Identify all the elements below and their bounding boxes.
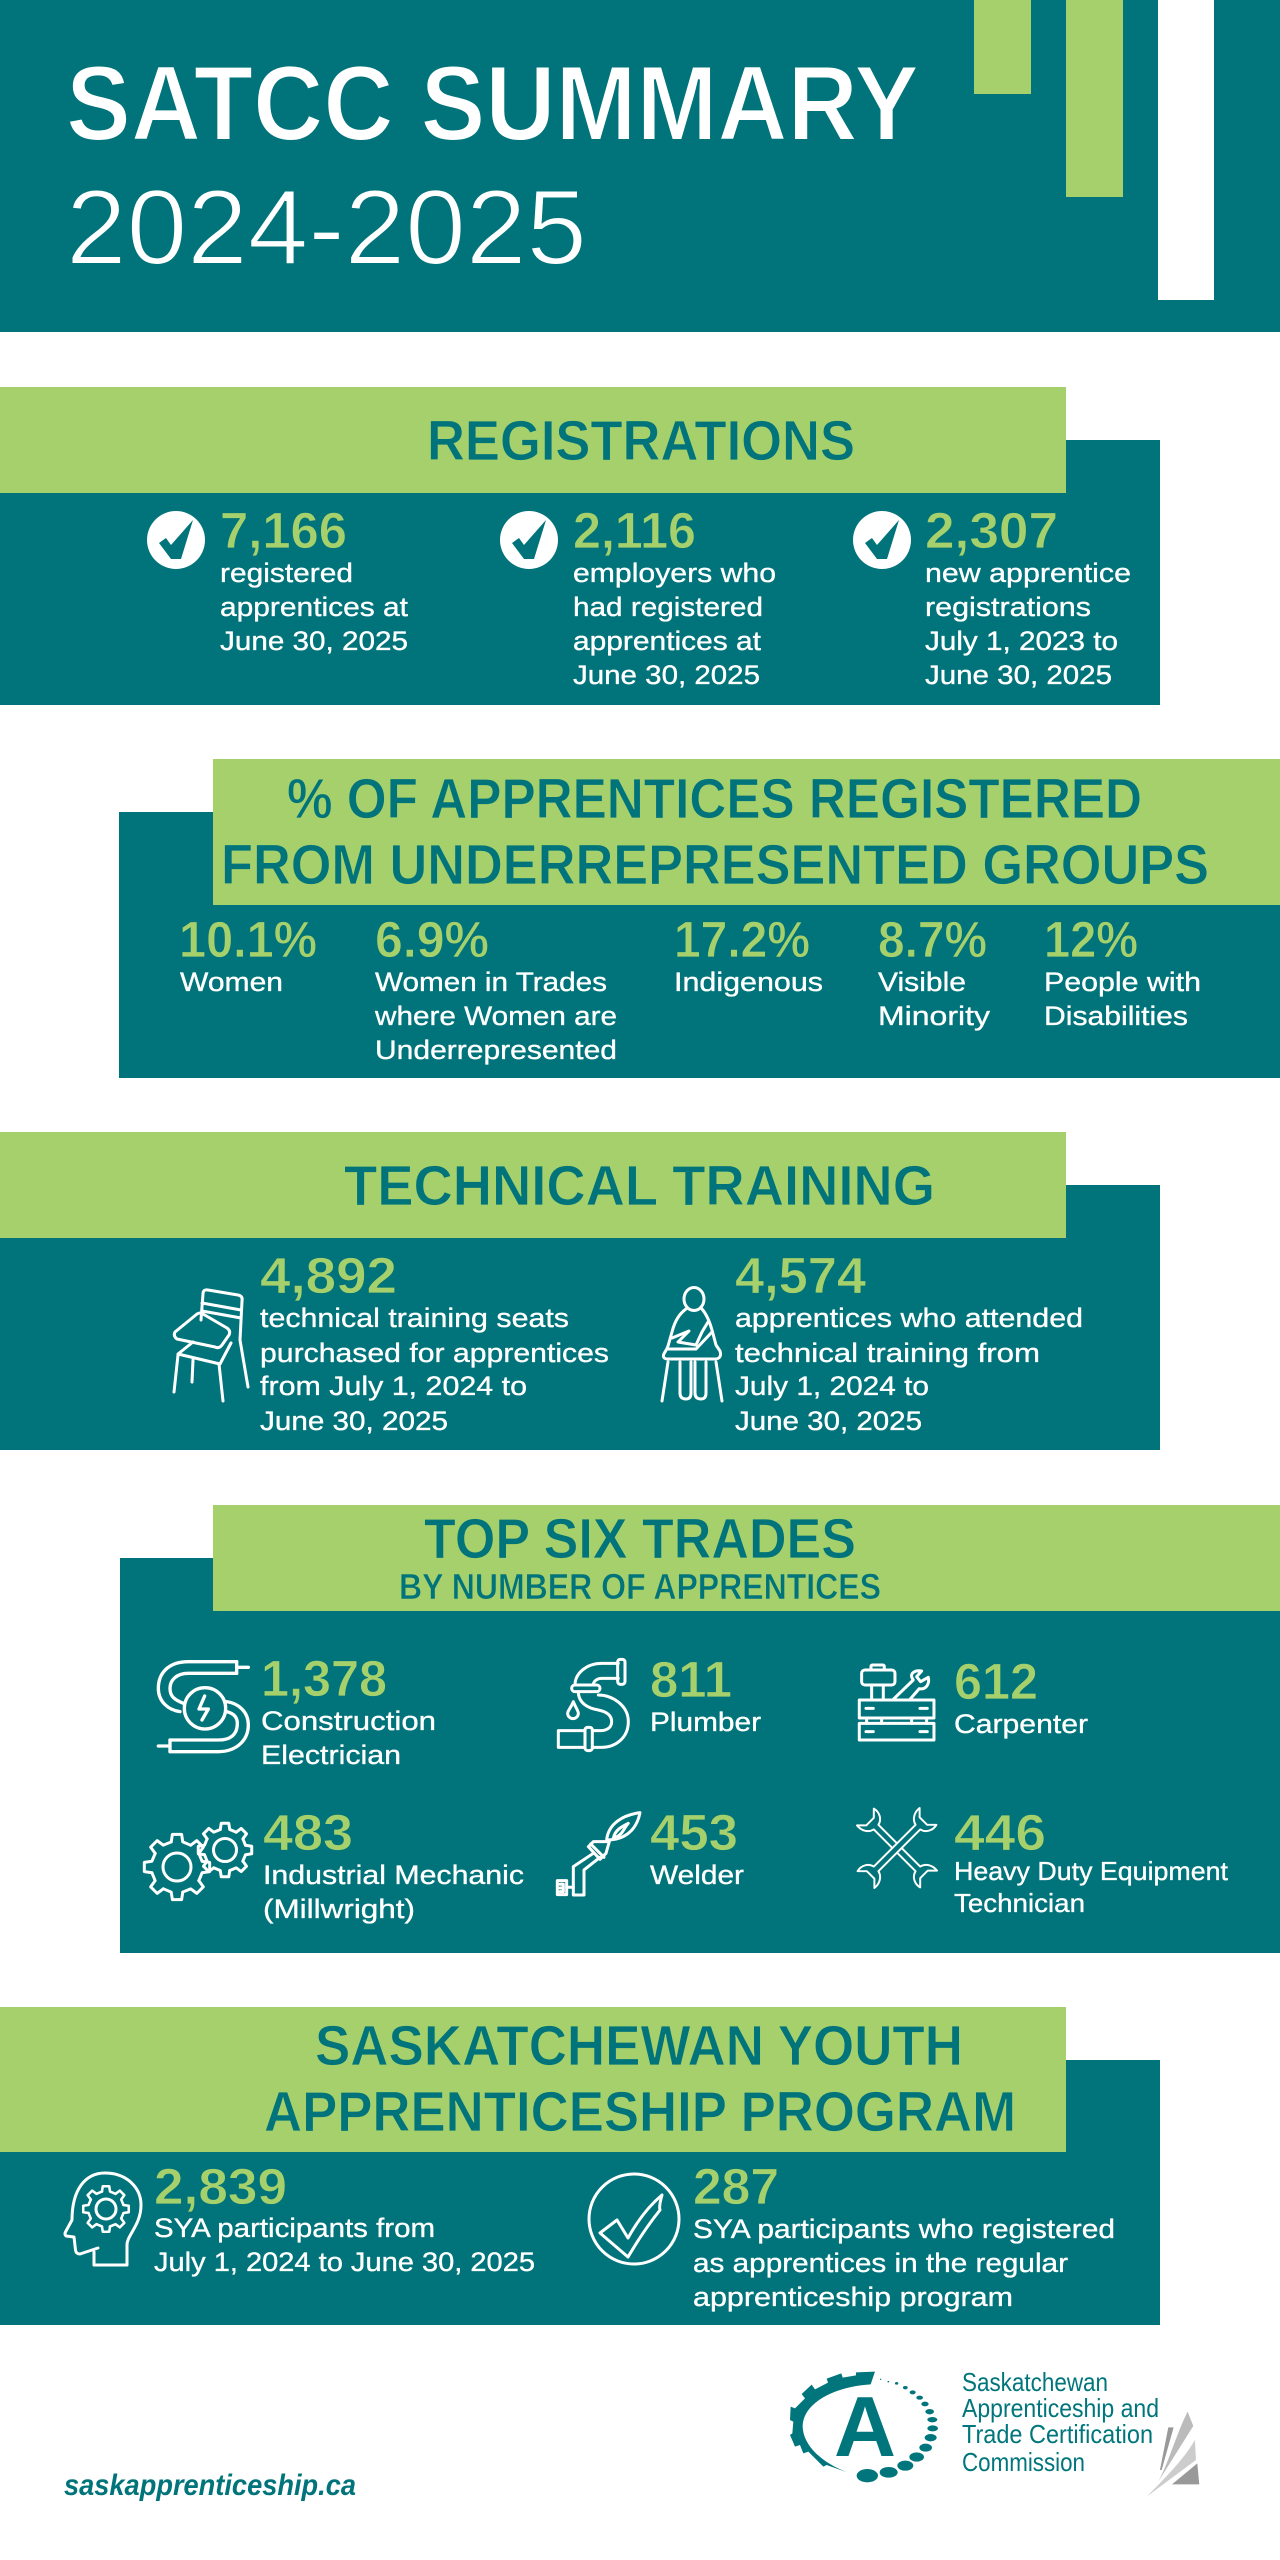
stat: plumber: Plumber	[650, 1707, 761, 1737]
stat: employers	[500, 502, 776, 690]
stat: new registrations: registrations	[925, 592, 1091, 622]
stat: registered apprentices: June 30, 2025	[220, 626, 408, 656]
stat: attended training: July 1, 2024 to	[735, 1371, 929, 1401]
icon: crossed wrenches	[857, 1808, 937, 1888]
stat: SYA participants: July 1, 2024 to June 30, 2025	[154, 2247, 535, 2277]
icon: welding torch	[557, 1813, 640, 1895]
icon: check badge	[500, 511, 558, 569]
stat: people with disabilities: People with	[1044, 967, 1201, 997]
icon: gears	[144, 1823, 252, 1900]
stat: construction electrician: Electrician	[261, 1740, 401, 1770]
heading: registrations: REGISTRATIONS	[427, 409, 855, 473]
stat: women: Women	[180, 967, 283, 997]
icon: circled check	[589, 2174, 679, 2264]
stat: industrial mechanic: 483	[263, 1804, 353, 1861]
stat: welder: 453	[650, 1804, 738, 1861]
stat: welder: Welder	[650, 1860, 744, 1890]
stat: new registrations: 2,307	[925, 502, 1058, 559]
stat: attended training: technical training from	[735, 1338, 1040, 1368]
stat: employers: employers who	[573, 558, 776, 588]
stat: visible minority	[878, 911, 991, 1031]
icon: toolbox	[859, 1665, 934, 1740]
panel: top six trades	[120, 1505, 1280, 1953]
stat: attended training: apprentices who attended	[735, 1303, 1083, 1333]
logo mark: gear arc with A: A	[834, 2380, 896, 2475]
stat: registered apprentices: registered	[220, 558, 353, 588]
heading: top six trades: BY NUMBER OF APPRENTICES	[399, 1566, 881, 1607]
stat: heavy duty equipment technician: Heavy Duty Equipment	[954, 1856, 1229, 1886]
stat: construction electrician: 1,378	[261, 1650, 387, 1707]
stat: SYA registered as apprentices: SYA participants who registered	[693, 2214, 1115, 2244]
logo text: Trade Certification	[962, 2419, 1153, 2449]
stat: plumber	[650, 1651, 761, 1737]
stat: people with disabilities	[1044, 911, 1201, 1031]
stat: training seats: June 30, 2025	[260, 1406, 448, 1436]
stat: construction electrician: Construction	[261, 1706, 436, 1736]
icon: check badge	[853, 511, 911, 569]
stat: attended training	[735, 1247, 1083, 1436]
stat: registered apprentices	[147, 502, 409, 656]
icon: electrical cables	[158, 1662, 248, 1752]
stat: training seats: technical training seats	[260, 1303, 569, 1333]
heading: top six trades	[399, 1507, 881, 1607]
stat: SYA participants: 2,839	[154, 2158, 287, 2215]
stat: employers: 2,116	[573, 502, 696, 559]
panel: youth apprenticeship program	[0, 2007, 1160, 2325]
icon: plumbing pipe	[558, 1659, 628, 1751]
logo mark: gear arc with A	[790, 2372, 938, 2482]
stat: employers: June 30, 2025	[573, 660, 760, 690]
stat: carpenter: 612	[954, 1653, 1038, 1710]
stat: carpenter: Carpenter	[954, 1709, 1088, 1739]
stat: employers: apprentices at	[573, 626, 762, 656]
stat: training seats	[260, 1247, 609, 1436]
logo text: Commission	[962, 2447, 1085, 2477]
panel: underrepresented groups	[119, 759, 1280, 1078]
stat: training seats: from July 1, 2024 to	[260, 1371, 527, 1401]
heading: youth apprenticeship program	[264, 2014, 1016, 2144]
panel: registrations	[0, 387, 1160, 705]
heading: youth apprenticeship program: SASKATCHEWAN YOUTH	[315, 2014, 963, 2078]
heading: technical training: TECHNICAL TRAINING	[344, 1154, 935, 1218]
stat: SYA registered as apprentices	[693, 2158, 1115, 2312]
title: SATCC SUMMARY	[66, 43, 919, 163]
stat: training seats: 4,892	[260, 1247, 397, 1304]
logo: commission	[790, 2367, 1199, 2497]
heading: youth apprenticeship program: APPRENTICESHIP PROGRAM	[264, 2080, 1016, 2144]
stat: welder	[650, 1804, 744, 1890]
stat: new registrations: June 30, 2025	[925, 660, 1112, 690]
title: 2024-2025	[66, 167, 587, 287]
stat: visible minority: Minority	[878, 1001, 991, 1031]
stat: visible minority: Visible	[878, 967, 966, 997]
stat: indigenous: Indigenous	[674, 967, 823, 997]
heading: top six trades: TOP SIX TRADES	[424, 1507, 856, 1571]
stat: women	[179, 911, 317, 997]
stat: SYA registered as apprentices: apprenticeship program	[693, 2282, 1013, 2312]
header banner	[0, 0, 1280, 332]
stat: new registrations: new apprentice	[925, 558, 1131, 588]
icon: chair	[174, 1290, 248, 1401]
stat: women in trades	[374, 911, 617, 1065]
stat: women in trades: Underrepresented	[375, 1035, 617, 1065]
stat: heavy duty equipment technician	[954, 1804, 1229, 1918]
icon: seated person	[662, 1288, 722, 1401]
stat: plumber: 811	[650, 1651, 732, 1708]
stat: women: 10.1%	[179, 911, 317, 968]
stat: SYA participants	[154, 2158, 535, 2277]
stat: SYA registered as apprentices: as apprentices in the regular	[693, 2248, 1068, 2278]
stat: training seats: purchased for apprentices	[260, 1338, 609, 1368]
logo text: Apprenticeship and	[962, 2393, 1159, 2423]
stat: industrial mechanic: (Millwright)	[263, 1894, 415, 1924]
stat: indigenous	[674, 911, 823, 997]
stat: visible minority: 8.7%	[878, 911, 987, 968]
stat: carpenter	[954, 1653, 1088, 1739]
stat: registered apprentices: 7,166	[220, 502, 347, 559]
logo text	[962, 2367, 1159, 2477]
stat: indigenous: 17.2%	[674, 911, 810, 968]
stat: SYA participants: SYA participants from	[154, 2213, 435, 2243]
stat: SYA registered as apprentices: 287	[693, 2158, 779, 2215]
icon: check badge	[147, 511, 205, 569]
stat: heavy duty equipment technician: 446	[954, 1804, 1046, 1861]
stat: people with disabilities: Disabilities	[1044, 1001, 1188, 1031]
title	[66, 43, 919, 287]
logo: grey sail mark	[1147, 2412, 1199, 2497]
stat: industrial mechanic: Industrial Mechanic	[263, 1860, 524, 1890]
stat: employers: had registered	[573, 592, 763, 622]
icon: head with gear	[65, 2173, 141, 2265]
website link: saskapprenticeship.ca	[64, 2469, 356, 2502]
stat: women in trades: where Women are	[374, 1001, 617, 1031]
panel: technical training	[0, 1132, 1160, 1450]
stat: attended training: June 30, 2025	[735, 1406, 922, 1436]
stat: new registrations	[853, 502, 1131, 690]
stat: heavy duty equipment technician: Technician	[954, 1888, 1085, 1918]
stat: industrial mechanic	[263, 1804, 524, 1924]
heading: underrepresented groups: FROM UNDERREPRESENTED GROUPS	[221, 833, 1209, 897]
heading: underrepresented groups	[221, 767, 1209, 897]
stat: women in trades: 6.9%	[375, 911, 489, 968]
stat: registered apprentices: apprentices at	[220, 592, 409, 622]
decorative bars	[974, 0, 1214, 300]
stat: attended training: 4,574	[735, 1247, 867, 1304]
stat: women in trades: Women in Trades	[375, 967, 607, 997]
heading: underrepresented groups: % OF APPRENTICES REGISTERED	[287, 767, 1142, 831]
stat: new registrations: July 1, 2023 to	[925, 626, 1118, 656]
stat: people with disabilities: 12%	[1044, 911, 1138, 968]
stat: construction electrician	[261, 1650, 436, 1770]
logo text: Saskatchewan	[962, 2367, 1108, 2397]
